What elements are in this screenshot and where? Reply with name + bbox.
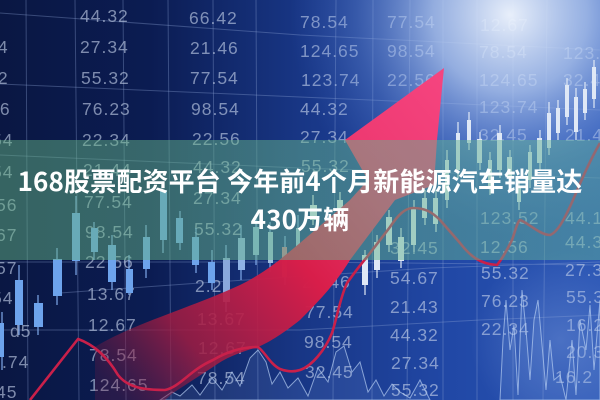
table of numbers: 78.54 — [197, 368, 246, 388]
table of numbers: 16.2 — [555, 367, 593, 387]
table of numbers: 98.54 — [304, 332, 353, 352]
candlesticks — [0, 60, 596, 370]
table of numbers: 77.54 — [84, 192, 133, 212]
table of numbers: 124.65 — [89, 375, 149, 395]
table of numbers: 123.52 — [480, 208, 540, 228]
table of numbers: 98.54 — [387, 41, 436, 61]
table of numbers: .74 — [2, 352, 29, 372]
table of numbers: 55.32 — [301, 156, 350, 176]
table of numbers: d5 — [10, 321, 31, 341]
table of numbers: 21.46 — [190, 38, 239, 58]
table of numbers: 76.23 — [82, 99, 131, 119]
table of numbers: 21.43 — [390, 297, 439, 317]
table of numbers: 27.34 — [80, 37, 129, 57]
table of numbers: 77.54 — [305, 302, 354, 322]
title text — [18, 162, 582, 237]
table of numbers: 12.56 — [480, 237, 529, 257]
table of numbers: 124.65 — [479, 70, 539, 90]
spiky waveforms — [160, 290, 600, 400]
table of numbers: 32.45 — [390, 238, 439, 258]
title text: 168股票配资平台 今年前4个月新能源汽车销量达 — [18, 162, 582, 199]
table of numbers: 22.56 — [85, 252, 134, 272]
table of numbers: 22.56 — [192, 129, 241, 149]
table of numbers: 124.65 — [300, 41, 360, 61]
table of numbers: 55.32 — [391, 380, 440, 400]
table of numbers: 12.67 — [480, 15, 529, 35]
table of numbers: 13.67 — [197, 309, 246, 329]
table of numbers: 44.32 — [390, 325, 439, 345]
table of numbers: 54.67 — [390, 268, 439, 288]
table of numbers: 2.2 — [195, 276, 222, 296]
table of numbers: 76.23 — [481, 291, 530, 311]
table of numbers: 27.34 — [391, 353, 440, 373]
table of numbers: 13.67 — [87, 284, 136, 304]
table of numbers: 22.34 — [82, 130, 131, 150]
table of numbers: 98.54 — [85, 222, 134, 242]
table of numbers: 55.32 — [194, 219, 243, 239]
table of numbers: 55.32 — [81, 68, 130, 88]
table of numbers: 123.74 — [479, 97, 539, 117]
red trend line — [30, 143, 600, 400]
table of numbers: 77.54 — [190, 68, 239, 88]
table of numbers: 44.32 — [80, 6, 129, 26]
table of numbers: 27.34 — [300, 127, 349, 147]
title text: 430万辆 — [251, 200, 349, 237]
green title band — [0, 140, 600, 260]
table of numbers: 32.45 — [479, 125, 528, 145]
table of numbers: 78.54 — [89, 345, 138, 365]
table of numbers: 12.67 — [88, 315, 137, 335]
table of numbers: 98.54 — [191, 99, 240, 119]
table of numbers: 78.54 — [300, 12, 349, 32]
table of numbers: 66.42 — [189, 8, 238, 28]
table of numbers: 44.32 — [193, 157, 242, 177]
table of numbers: 44.32 — [300, 99, 349, 119]
table of numbers: 22.34 — [481, 319, 530, 339]
table of numbers: 22.56 — [387, 70, 436, 90]
table of numbers: 21.46 — [302, 272, 351, 292]
table of numbers: 77.54 — [387, 12, 436, 32]
table of numbers: 78.54 — [479, 42, 528, 62]
red rising arrow — [95, 68, 444, 400]
table of numbers: 55.32 — [481, 263, 530, 283]
table of numbers: 12.67 — [198, 338, 247, 358]
table of numbers: 21.44 — [83, 160, 132, 180]
table of numbers: 123.74 — [301, 70, 361, 90]
table of numbers: 32.45 — [305, 362, 354, 382]
table of numbers: 27.34 — [193, 188, 242, 208]
